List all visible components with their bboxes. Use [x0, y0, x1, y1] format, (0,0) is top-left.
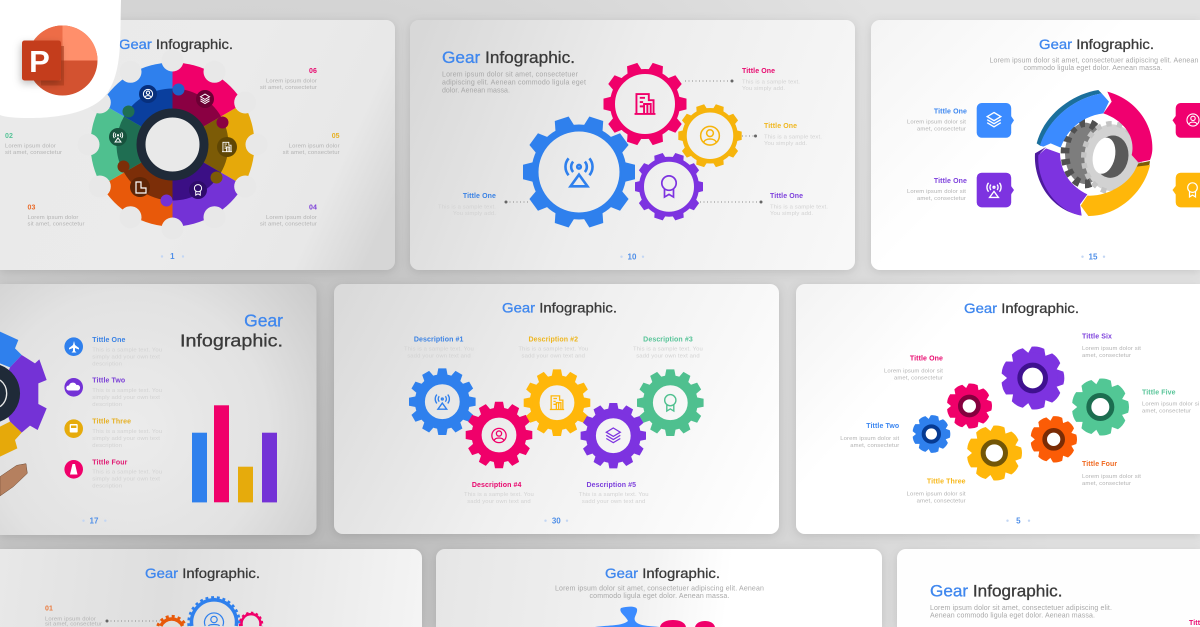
label: six: Lorem ipsum dolor sit	[1082, 346, 1141, 352]
page number	[1006, 516, 1030, 526]
icon: building	[217, 137, 237, 157]
gear: purple	[581, 403, 646, 468]
panel: bottom-right gear slide	[897, 549, 1200, 627]
label: four	[1082, 461, 1141, 487]
gear: pink	[604, 62, 686, 146]
heading: Gear Infographic.	[442, 49, 575, 67]
gear: green	[637, 369, 704, 436]
list item: four: simply add your own text	[92, 476, 160, 482]
intro paragraph	[555, 586, 764, 600]
description 3	[633, 336, 703, 360]
label: two: amet, consectetur	[850, 443, 899, 449]
list item: two: description	[92, 402, 122, 408]
label: one: Lorem ipsum dolor sit	[884, 368, 943, 374]
label: blue: Tittle One	[934, 109, 967, 116]
list item: two: Tittle Two	[92, 378, 125, 385]
panel: six-part gear slide	[0, 20, 395, 270]
label 03: 03	[28, 205, 36, 212]
page number	[620, 252, 644, 262]
description 3: Description #3	[643, 336, 693, 344]
3D ring with gear	[1035, 90, 1152, 216]
label 03: Lorem ipsum dolor	[28, 215, 78, 221]
page number: 10	[628, 252, 637, 262]
description 2	[518, 336, 588, 360]
label 04	[260, 205, 317, 228]
label 05: sit amet, consectetur	[283, 150, 340, 156]
label: purple: Tittle One	[934, 178, 967, 185]
heading: Gear Infographic.	[605, 565, 720, 581]
label 01: 01	[45, 606, 53, 613]
icon: ruler	[130, 177, 150, 197]
label: purple: Lorem ipsum dolor sit	[907, 189, 966, 195]
intro paragraph: dolor. Aenean massa.	[442, 87, 510, 94]
list item: three: simply add your own text	[92, 436, 160, 442]
label: one: amet, consectetur	[894, 376, 943, 382]
list item: three	[64, 419, 162, 449]
label: one: Tittle One	[910, 356, 943, 363]
label: two: Lorem ipsum dolor sit	[840, 436, 900, 442]
list item: one: simply add your own text	[92, 354, 160, 360]
list item: two	[64, 378, 162, 408]
intro paragraph: commodo ligula eget dolor. Aenean massa.	[1024, 65, 1162, 72]
label 02: 02	[5, 133, 13, 140]
description 1: Description #1	[414, 336, 464, 344]
segmented gear	[78, 50, 268, 240]
page number	[544, 516, 568, 526]
gear: blue	[409, 368, 476, 435]
label: two	[840, 423, 900, 449]
label: yellow: You simply add.	[764, 141, 807, 147]
intro paragraph	[990, 58, 1198, 72]
list item: two: This is a sample text. You	[92, 388, 162, 394]
intro paragraph: Lorem ipsum dolor sit amet, consectetuer adipiscing elit.	[930, 605, 1112, 612]
label: purple	[700, 193, 828, 217]
list item: one: This is a sample text. You	[92, 348, 162, 354]
label: pink: This is a sample text.	[742, 80, 800, 86]
label 04: 04	[309, 205, 317, 212]
gear held in hand	[0, 332, 47, 496]
list item: four: description	[92, 484, 122, 490]
icon tile: layers	[977, 103, 1014, 138]
page number	[161, 252, 184, 261]
label: one	[884, 356, 943, 382]
list item: three: This is a sample text. You	[92, 429, 162, 435]
page number: 30	[552, 516, 561, 526]
label: purple	[907, 178, 967, 202]
intro paragraph: Lorem ipsum dolor sit amet, consectetuer adipiscing elit. Aenean	[990, 58, 1198, 64]
label: five	[1142, 389, 1199, 414]
panel: four linked gears slide	[410, 20, 855, 270]
icon: PowerPoint logo: P	[29, 44, 50, 79]
page number: 5	[1016, 516, 1021, 526]
panel: 3D gear ring slide	[871, 20, 1200, 270]
panel: six scattered gears slide	[796, 284, 1200, 534]
label: yellow: Tittle One	[764, 123, 797, 130]
list item: four: This is a sample text. You	[92, 470, 162, 476]
list item: three: description	[92, 443, 122, 449]
list item: two: simply add your own text	[92, 395, 160, 401]
label: yellow	[742, 123, 822, 147]
icon: person badge	[139, 85, 157, 103]
gear: pink	[466, 402, 532, 468]
description 1: This is a sample text. You	[404, 346, 474, 352]
label: purple: Tittle One	[770, 193, 803, 200]
page number: 15	[1089, 252, 1098, 262]
label: two: Tittle Two	[866, 423, 899, 430]
label 03: sit amet, consectetur	[28, 222, 85, 228]
description 5: Description #5	[586, 482, 636, 489]
heading: Infographic.	[180, 331, 283, 351]
label 05	[283, 133, 340, 156]
heading: Gear	[244, 311, 283, 331]
label: four: Lorem ipsum dolor sit	[1082, 474, 1141, 480]
description 5	[579, 482, 649, 505]
description 2: Description #2	[528, 336, 578, 344]
list item: one	[64, 337, 162, 368]
label 02	[5, 133, 62, 156]
label: five: Tittle Five	[1142, 389, 1176, 396]
list item: one: description	[92, 362, 122, 368]
description 2: This is a sample text. You	[518, 346, 588, 352]
page number	[1081, 252, 1105, 262]
description 4	[464, 482, 534, 505]
label: purple: This is a sample text.	[770, 204, 828, 210]
label: four: Tittle Four	[1082, 461, 1117, 468]
description 3: sadd your own text and	[636, 354, 700, 360]
label: six	[1082, 334, 1141, 359]
description 2: sadd your own text and	[522, 354, 585, 360]
label: three: amet, consectetur	[917, 498, 966, 504]
label: purple: amet, consectetur	[917, 196, 966, 202]
puzzle gear	[595, 607, 715, 627]
label 03	[28, 205, 85, 228]
intro paragraph	[442, 72, 586, 94]
label: six: amet, consectetur	[1082, 353, 1131, 359]
heading: Gear Infographic.	[119, 36, 233, 52]
label: purple: You simply add.	[770, 211, 813, 217]
label 05: 05	[332, 133, 340, 140]
label: pink: Titt	[1189, 620, 1200, 627]
bar chart	[192, 405, 277, 502]
scattered gears	[912, 345, 1129, 482]
label: blue	[907, 109, 967, 132]
label: five: Lorem ipsum dolor si	[1142, 402, 1199, 408]
label 04: sit amet, consectetur	[260, 222, 317, 228]
label: blue: Lorem ipsum dolor sit	[907, 120, 966, 126]
PowerPoint badge	[0, 0, 121, 118]
list item: four: Tittle Four	[92, 459, 128, 466]
gear: purple	[635, 152, 703, 221]
label: three: Lorem ipsum dolor sit	[907, 492, 966, 498]
heading: Gear Infographic.	[964, 300, 1079, 316]
page number	[82, 516, 107, 526]
label 01: Lorem ipsum dolor	[45, 616, 96, 622]
label: pink: Tittle One	[742, 68, 775, 75]
label: three	[907, 479, 966, 504]
description 1	[404, 336, 474, 360]
label 04: Lorem ipsum dolor	[266, 215, 317, 221]
icon: award	[189, 181, 207, 199]
list item: one: Tittle One	[92, 337, 125, 344]
list item: three: Tittle Three	[92, 419, 131, 426]
gear: pink	[240, 613, 262, 626]
heading	[180, 311, 283, 351]
description 1: sadd your own text and	[407, 354, 471, 360]
panel: hand gear and bar chart slide	[0, 284, 316, 535]
panel: gear chain slide	[334, 284, 779, 534]
label: three: Tittle Three	[927, 479, 966, 486]
label 02: sit amet, consectetur	[5, 150, 62, 156]
label: pink	[685, 68, 800, 92]
gear hub	[141, 113, 204, 176]
icon tile: award	[1172, 173, 1200, 207]
gear: yellow	[524, 369, 590, 436]
description 4: Description #4	[472, 482, 522, 489]
gear: blue	[189, 598, 239, 626]
panel: bottom-left gear slide	[0, 549, 422, 627]
gear: yellow	[678, 104, 742, 168]
label: blue: This is a sample text.	[438, 204, 496, 210]
page number: 1	[170, 252, 175, 261]
label 06: Lorem ipsum dolor	[266, 78, 317, 84]
icon: antenna	[109, 128, 127, 146]
label: five: amet, consectetur	[1142, 408, 1191, 414]
intro paragraph	[930, 605, 1112, 620]
panel: bottom-centre gear slide	[436, 549, 882, 627]
label: blue: You simply add.	[453, 211, 496, 217]
intro paragraph: Lorem ipsum dolor sit amet, consectetuer	[442, 72, 579, 78]
heading: Gear Infographic.	[502, 300, 617, 316]
page number: 17	[90, 516, 99, 526]
label: blue: Tittle One	[463, 193, 496, 200]
heading: Gear Infographic.	[1039, 36, 1154, 52]
label 06: 06	[309, 68, 317, 75]
description 4: sadd your own text and	[467, 499, 531, 505]
description 5: This is a sample text. You	[579, 492, 649, 498]
description 4: This is a sample text. You	[464, 492, 534, 498]
label 02: Lorem ipsum dolor	[5, 144, 56, 150]
heading: Gear Infographic.	[930, 583, 1062, 601]
label 06: sit amet, consectetur	[260, 85, 317, 91]
label: four: amet, consectetur	[1082, 481, 1131, 487]
label 05: Lorem ipsum dolor	[289, 144, 340, 150]
icon tile: antenna	[977, 173, 1014, 207]
gear: blue	[523, 115, 635, 229]
intro paragraph: adipiscing elit. Aenean commodo ligula eget	[442, 80, 586, 86]
list item: four	[64, 459, 162, 490]
label: six: Tittle Six	[1082, 334, 1112, 341]
gear: orange	[158, 616, 186, 626]
icon tile: person	[1172, 103, 1200, 138]
icon: layers	[196, 90, 214, 108]
description 3: This is a sample text. You	[633, 346, 703, 352]
intro paragraph: Aenean commodo ligula eget dolor. Aenean massa.	[930, 612, 1095, 620]
heading: Gear Infographic.	[145, 565, 260, 581]
label 01	[45, 606, 160, 627]
label: blue	[438, 193, 530, 217]
intro paragraph: Lorem ipsum dolor sit amet, consectetuer adipiscing elit. Aenean	[555, 586, 764, 592]
description 5: sadd your own text and	[582, 499, 645, 505]
label 06	[260, 68, 317, 91]
label: yellow: This is a sample text.	[764, 134, 822, 140]
label: blue: amet, consectetur	[917, 126, 966, 132]
label: pink: You simply add.	[742, 86, 785, 92]
intro paragraph: commodo ligula eget dolor. Aenean massa.	[590, 593, 730, 600]
